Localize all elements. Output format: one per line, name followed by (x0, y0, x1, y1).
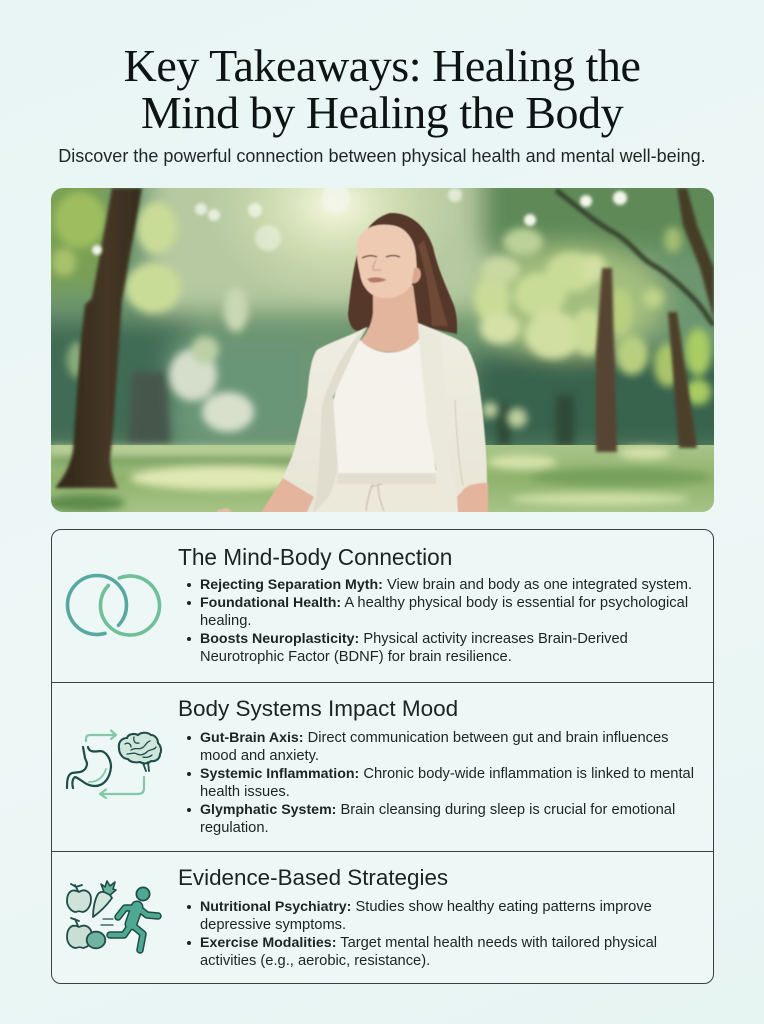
icon: food and runner (66, 880, 162, 954)
small fruit (87, 932, 105, 948)
text block: strategies bullets (187, 899, 657, 969)
leaf clusters (52, 192, 711, 432)
text block: strategies bullets: depressive symptoms. (200, 917, 346, 933)
tee shirt (332, 338, 436, 473)
grass (45, 445, 714, 512)
hair (348, 213, 457, 334)
panel: takeaways card (51, 529, 714, 984)
text block: body systems bullets (187, 730, 694, 836)
text block: mind-body bullets: Rejecting Separation Myth: View brain and body as one integrated system. (200, 577, 692, 593)
text block: mind-body bullets: Neurotrophic Factor (BDNF) for brain resilience. (200, 649, 512, 665)
photo contents (51, 188, 714, 512)
heading: evidence-based strategies: Evidence-Based Strategies (178, 865, 448, 890)
icon: gut and brain with arrows (66, 729, 162, 800)
arrow: brain to gut (100, 777, 144, 798)
stomach (67, 747, 87, 788)
sun glow (232, 188, 438, 284)
text block: body systems bullets: mood and anxiety. (200, 748, 319, 764)
icon: interlocking rings (66, 574, 162, 637)
apple top (67, 890, 91, 912)
runner (110, 887, 158, 950)
text block: body systems bullets: Glymphatic System: Brain cleansing during sleep is crucial for emotional (200, 802, 675, 818)
arrow: gut to brain (86, 730, 116, 741)
panel: body systems impact mood (52, 683, 713, 852)
woman (217, 213, 488, 514)
foreground trunks and branches (55, 188, 714, 488)
text block: body systems bullets: Systemic Inflammation: Chronic body-wide inflammation is linked to mental (200, 766, 694, 782)
heading: body systems impact mood: Body Systems Impact Mood (178, 696, 458, 721)
apple bottom (67, 926, 92, 948)
text block: mind-body bullets (187, 577, 692, 665)
bokeh highlights (92, 184, 627, 255)
photo: woman meditating in a sunlit park (51, 188, 714, 512)
text block: body systems bullets: regulation. (200, 820, 269, 836)
text block: mind-body bullets: Boosts Neuroplasticity: Physical activity increases Brain-Derived (200, 631, 628, 647)
brain (119, 733, 161, 763)
cardigan right (418, 323, 487, 514)
panel: evidence-based strategies (66, 865, 657, 969)
heading: the mind-body connection: The Mind-Body Connection (178, 544, 452, 570)
subtitle: Discover the powerful connection between physical health and mental well-being. (58, 146, 706, 166)
text block: strategies bullets: activities (e.g., aerobic, resistance). (200, 953, 430, 969)
text block: mind-body bullets: healing. (200, 613, 251, 629)
cardigan left (283, 327, 367, 514)
text block: body systems bullets: Gut-Brain Axis: Direct communication between gut and brain influences (200, 730, 668, 746)
speed lines (101, 919, 113, 925)
title: Key Takeaways: Healing the (124, 40, 640, 91)
neck (360, 285, 421, 352)
forearms (260, 478, 314, 514)
trousers (312, 470, 458, 514)
text block: strategies bullets: Nutritional Psychiatry: Studies show healthy eating patterns improve (200, 899, 652, 915)
title (124, 40, 640, 138)
title: Mind by Healing the Body (141, 87, 623, 138)
text block: body systems bullets: health issues. (200, 784, 290, 800)
carrot (93, 892, 112, 917)
text block: mind-body bullets: Foundational Health: A healthy physical body is essential for psychological (200, 595, 688, 611)
panel: the mind-body connection (52, 530, 713, 683)
forest backdrop (51, 188, 714, 506)
distant tree trunks (128, 372, 574, 445)
text block: strategies bullets: Exercise Modalities: Target mental health needs with tailored physical (200, 935, 657, 951)
face (357, 225, 417, 298)
